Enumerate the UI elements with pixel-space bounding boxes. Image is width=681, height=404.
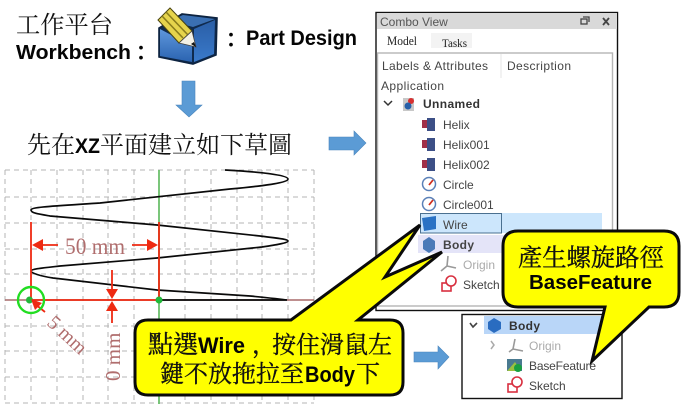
tree: sketch: Sketch xyxy=(463,278,500,292)
tree: helix items: Helix xyxy=(443,118,470,132)
callout: drag wire to body: 按住滑鼠左 xyxy=(272,332,392,359)
heading: sketch instruction xyxy=(27,132,292,159)
tree: sketch xyxy=(442,276,500,292)
tree frame xyxy=(378,53,612,306)
heading: workbench label xyxy=(16,12,156,64)
arrow: right to combo view xyxy=(329,131,366,155)
heading: sketch instruction: 先在 xyxy=(27,132,75,159)
icon: part design cube and pencil xyxy=(158,8,217,64)
row: basefeature: BaseFeature xyxy=(529,359,596,373)
row: origin: Origin xyxy=(529,339,561,353)
callout: drag wire to body: 點選 xyxy=(148,331,199,359)
callout: drag wire to body: Body xyxy=(305,362,356,387)
tree: application: Application xyxy=(381,79,444,93)
constraints: red dimension lines xyxy=(31,222,159,323)
dimension label: 0 mm: 0 mm xyxy=(101,333,125,381)
tree: body xyxy=(418,235,568,253)
tree: unnamed: Unnamed xyxy=(423,97,480,111)
tree: helix items: Helix001 xyxy=(443,138,490,152)
tab: tasks: Tasks xyxy=(442,36,467,50)
heading: workbench label: Workbench xyxy=(16,42,131,64)
dimension label: 5 mm: 5 mm xyxy=(43,312,92,359)
window controls xyxy=(581,17,609,25)
helix curve xyxy=(31,170,288,300)
heading: part design name: ： xyxy=(226,29,246,51)
end point xyxy=(156,296,162,304)
tree: body: Body xyxy=(443,238,474,252)
row: body xyxy=(470,316,602,334)
heading: workbench label: ： xyxy=(136,42,156,64)
axis: horizontal xyxy=(5,299,314,301)
tab: model: Model xyxy=(387,34,417,48)
row: sketch: Sketch xyxy=(529,379,566,393)
callout: drag wire to body: 鍵不放拖拉至 xyxy=(160,361,304,388)
tree: origin: Origin xyxy=(463,258,495,272)
tree: origin xyxy=(441,256,495,272)
tree: wire selected: Wire xyxy=(443,218,468,232)
column headers: Labels & Attributes xyxy=(382,59,488,73)
tree: wire selected xyxy=(420,213,602,233)
callout: drag wire to body: Wire xyxy=(198,333,245,358)
arrowheads: dimension xyxy=(31,239,158,311)
heading: sketch instruction: 平面建立如下草圖 xyxy=(100,132,292,159)
tree: circle items: Circle001 xyxy=(443,198,494,212)
title bar xyxy=(377,13,617,29)
callout: drag wire to body: 下 xyxy=(356,362,380,388)
tab: model xyxy=(377,29,426,48)
row: body: Body xyxy=(509,319,540,333)
callout: base feature result xyxy=(503,231,679,361)
row: sketch xyxy=(508,377,566,393)
heading: sketch instruction: XZ xyxy=(75,135,100,158)
origin marker xyxy=(18,287,44,313)
tree: circle items: Circle xyxy=(443,178,474,192)
column headers: Description xyxy=(507,59,571,73)
callout: drag wire to body: ， xyxy=(252,333,276,359)
origin point xyxy=(26,296,33,304)
heading: workbench label: 工作平台 xyxy=(16,12,113,39)
tree: helix items xyxy=(422,118,490,172)
axis: vertical xyxy=(158,170,160,404)
callout: drag wire to body xyxy=(135,225,442,395)
tree: helix items: Helix002 xyxy=(443,158,490,172)
arrow: down xyxy=(176,81,202,117)
heading: part design name: Part Design xyxy=(246,27,357,50)
panel: combo view xyxy=(376,12,618,310)
panel: result tree xyxy=(462,314,622,398)
column headers xyxy=(382,54,571,78)
tree: unnamed xyxy=(384,97,480,111)
sketch drawing xyxy=(5,170,314,404)
callout: base feature result: 產生螺旋路徑 xyxy=(518,245,664,272)
tree: circle items xyxy=(422,178,494,212)
callout: base feature result: BaseFeature xyxy=(529,272,652,294)
row: origin xyxy=(491,339,561,353)
title text: Combo View xyxy=(380,15,448,29)
tab: tasks xyxy=(431,33,472,50)
arrow: right to result tree xyxy=(414,346,449,369)
dimension label: 50 mm: 50 mm xyxy=(65,234,125,259)
